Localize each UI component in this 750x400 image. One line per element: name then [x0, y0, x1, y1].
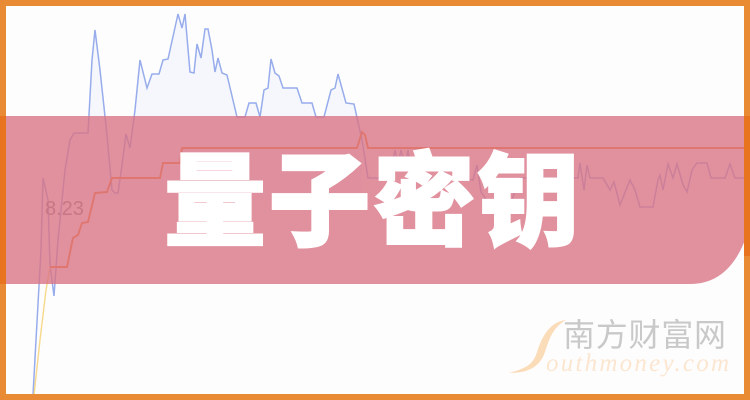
- frame bottom: [0, 394, 750, 400]
- swoosh S: [509, 320, 566, 373]
- orange average line: [50, 132, 745, 267]
- yellow start line: [34, 267, 50, 395]
- frame right darker section: [744, 116, 750, 256]
- title: 量子密钥: [164, 146, 582, 260]
- watermark domain: outhmoney.com: [546, 350, 729, 377]
- watermark logo: [509, 317, 729, 377]
- value label: 8.23: [45, 198, 84, 220]
- frame top: [0, 0, 750, 6]
- frame left: [0, 0, 6, 400]
- frame right: [744, 0, 750, 400]
- pink banner: [6, 116, 745, 284]
- blue area fill: [65, 14, 362, 200]
- watermark Chinese name: 南方财富网: [563, 317, 726, 353]
- frame left darker section: [0, 116, 6, 284]
